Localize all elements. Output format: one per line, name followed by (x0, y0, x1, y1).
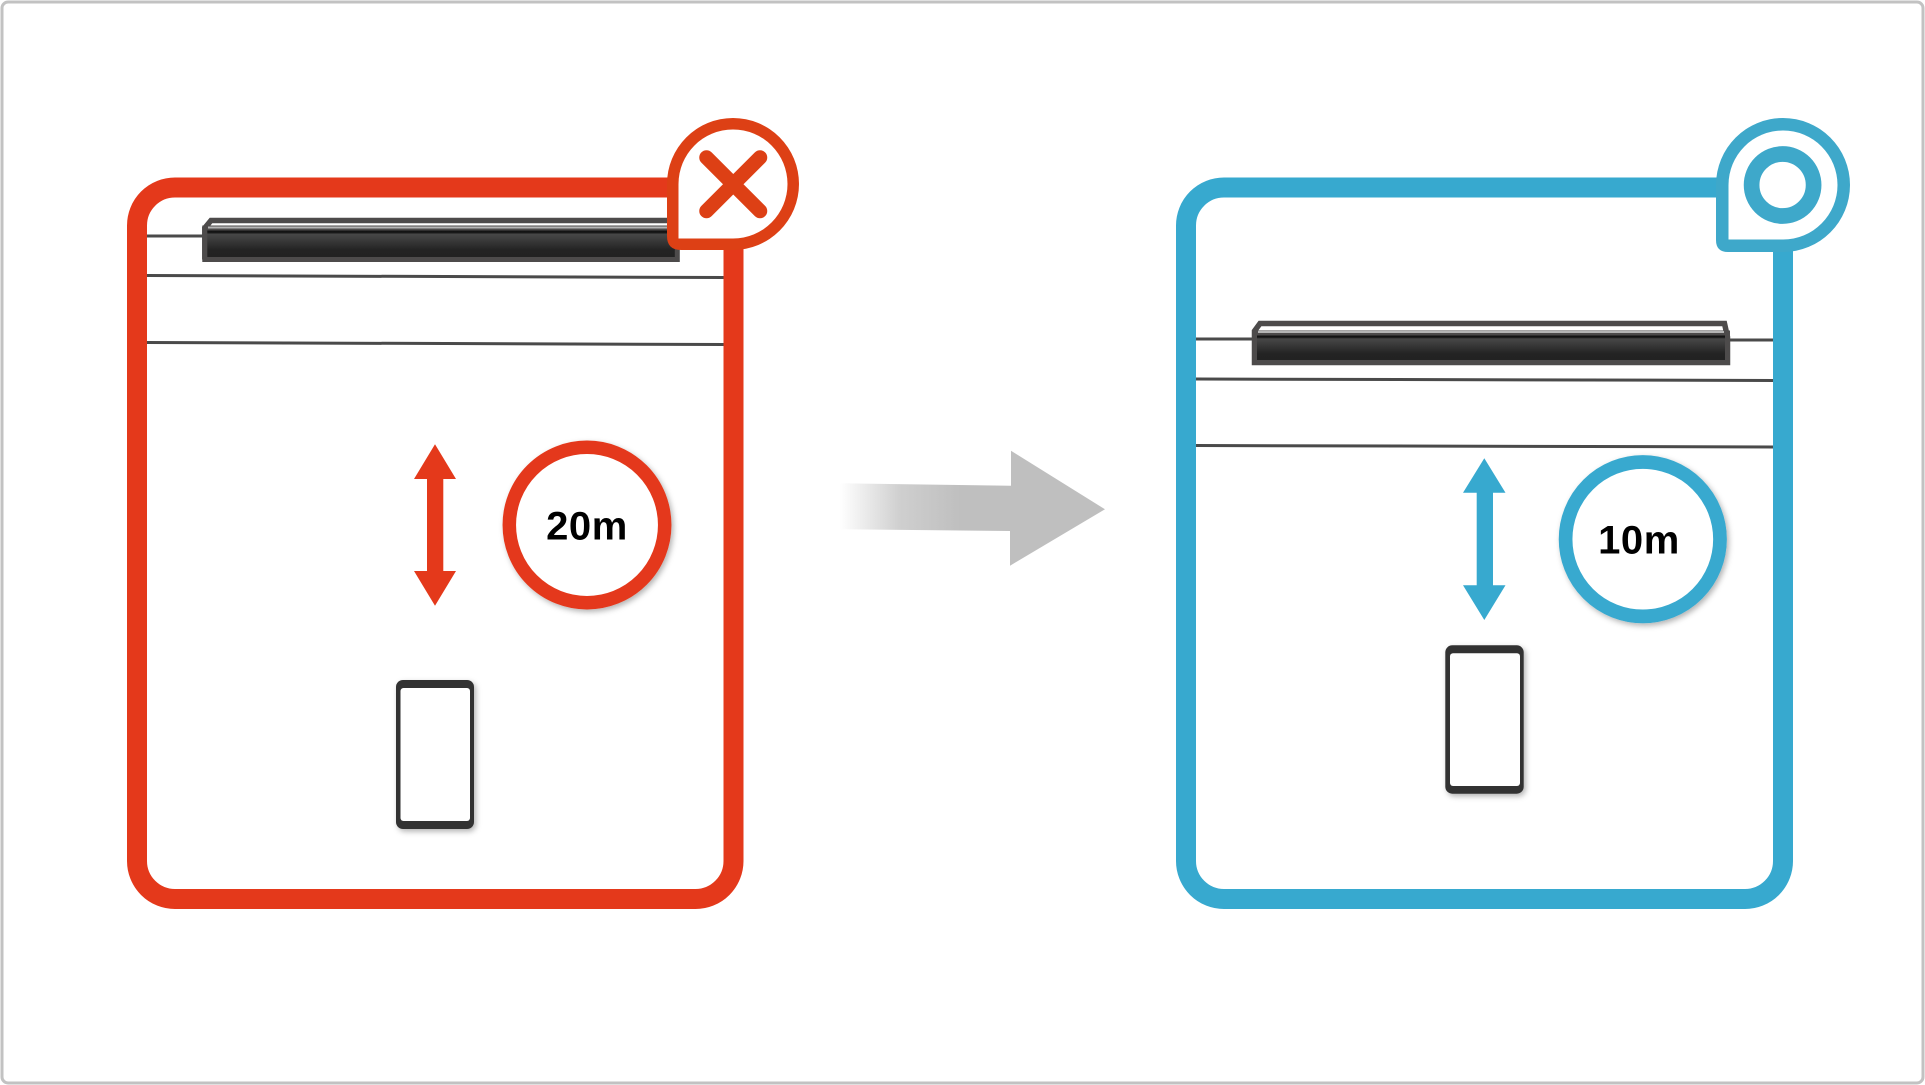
distance label circle (1566, 462, 1720, 616)
distance arrow (414, 444, 456, 606)
device bar (1254, 324, 1728, 362)
distance arrow (1463, 458, 1506, 620)
panel: after, 10m distance (1186, 118, 1850, 899)
room frame (137, 188, 734, 899)
distance label circle: 10m (1598, 518, 1680, 562)
distance label circle (509, 447, 665, 603)
panel: before, 20m distance (137, 118, 799, 899)
arrow: transition from before to after (840, 451, 1105, 566)
distance label circle: 20m (546, 504, 628, 548)
wall lines (1196, 339, 1774, 447)
phone (396, 680, 474, 829)
phone (1445, 645, 1524, 794)
status badge: cross (667, 118, 799, 250)
room frame (1186, 188, 1783, 899)
status badge: circle (1716, 118, 1850, 252)
wall lines (147, 236, 724, 344)
device bar (205, 220, 677, 260)
